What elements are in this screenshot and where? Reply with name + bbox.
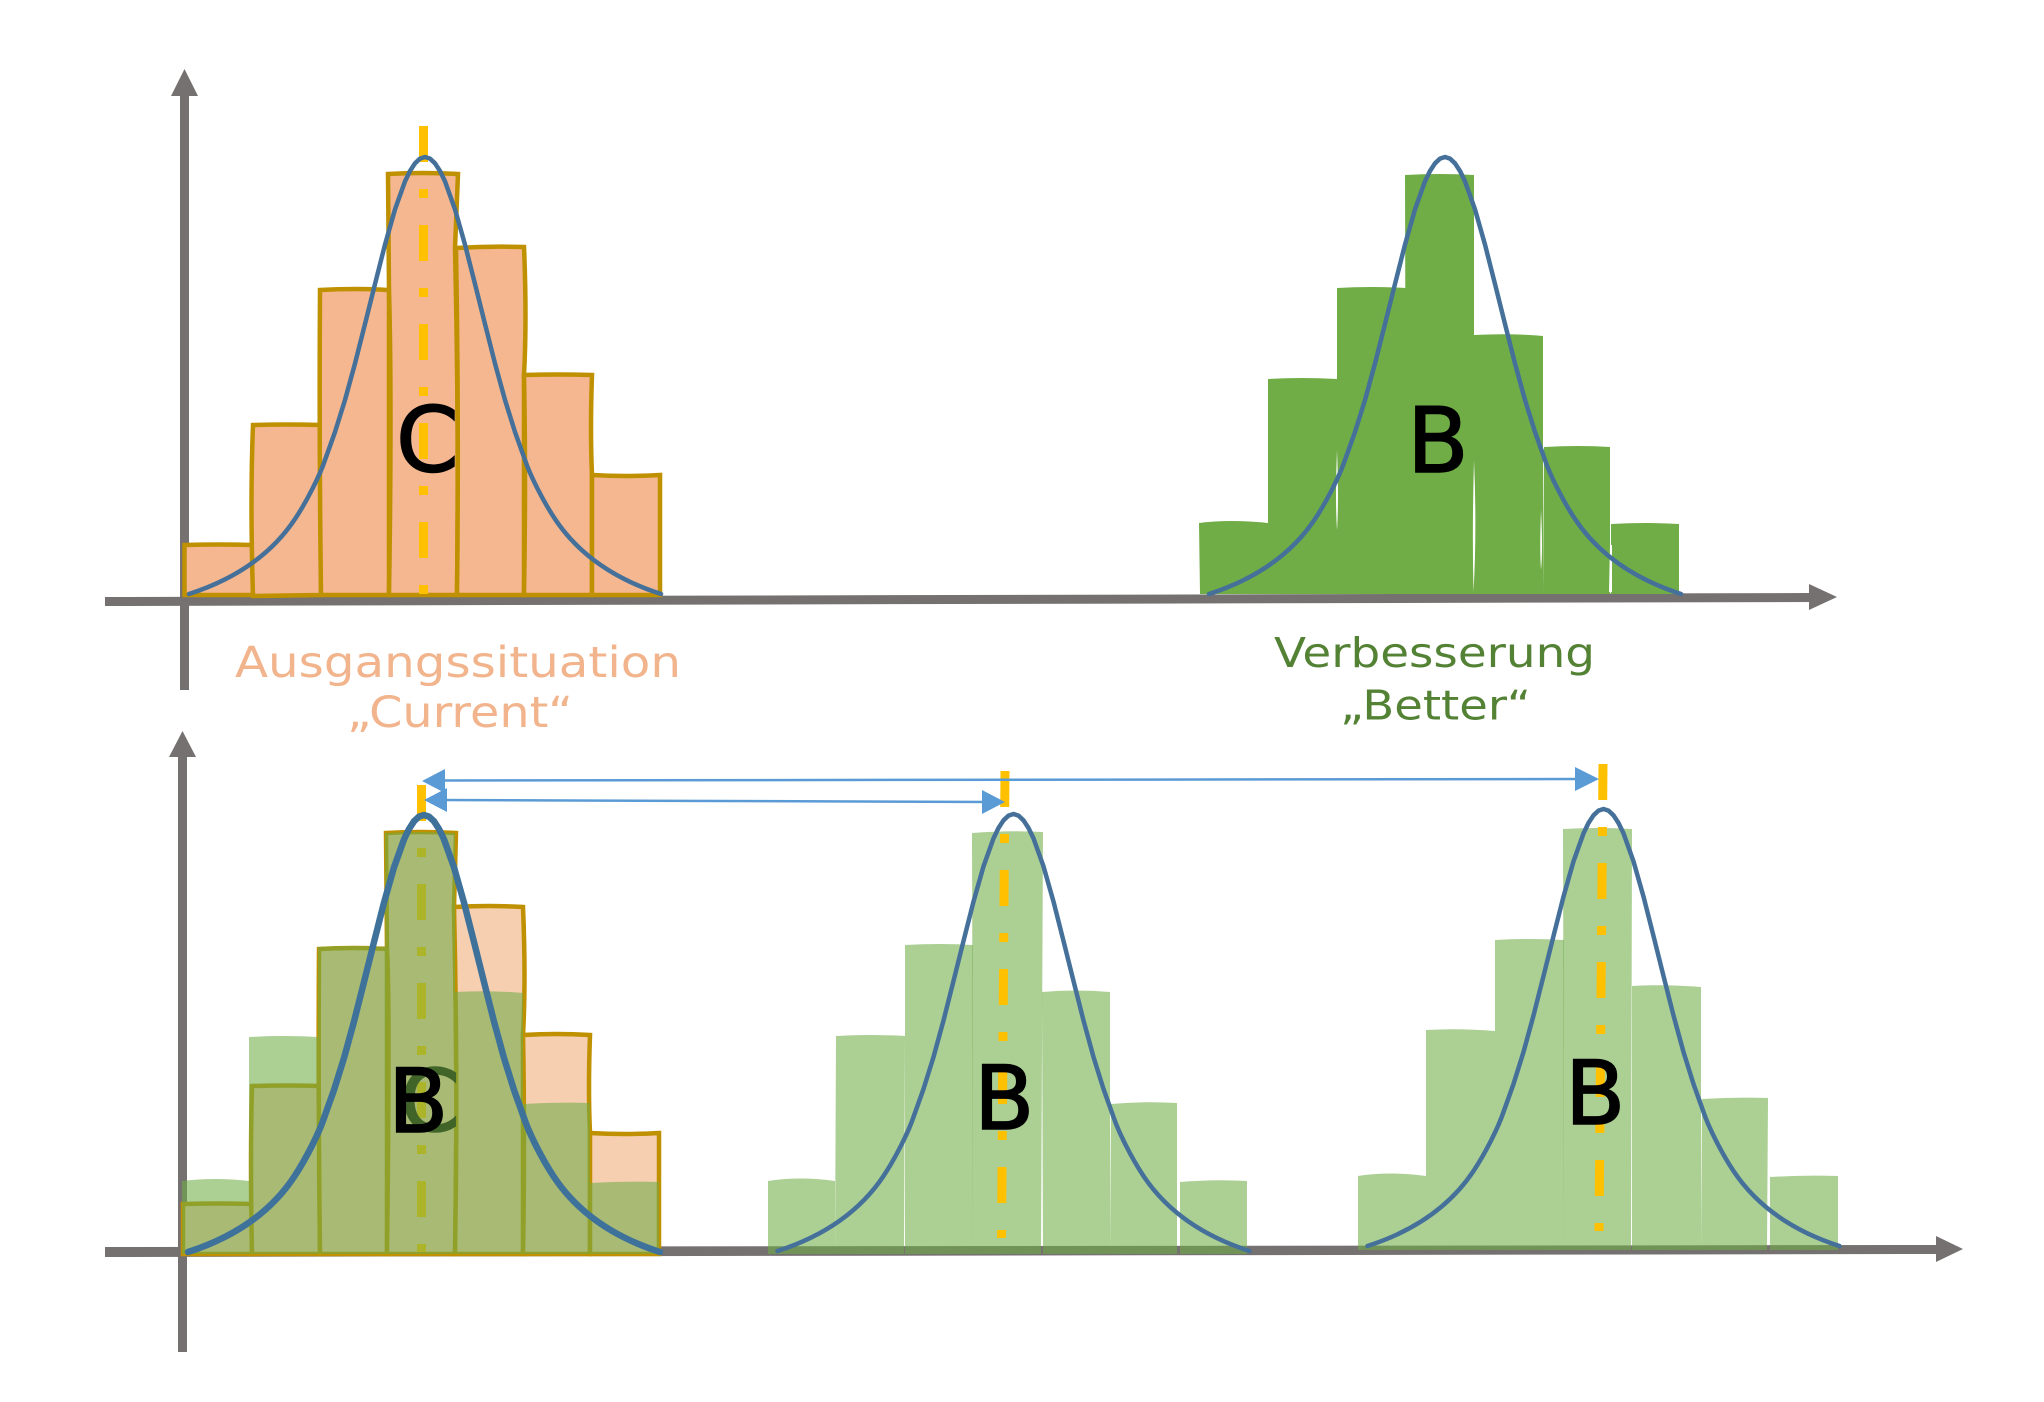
bell curve: middle [778, 814, 1250, 1251]
shifted distribution, right [1358, 764, 1840, 1250]
bell curve: better [1209, 157, 1681, 594]
label: Verbesserung Better: Verbesserung [1274, 629, 1595, 677]
histogram: current, faded [183, 832, 659, 1254]
median line: current [419, 126, 428, 594]
bottom x axis with arrow [105, 1236, 1963, 1262]
shifted distribution, middle [768, 771, 1250, 1254]
bell curve: current [189, 157, 661, 594]
histogram: better, transparent overlay [182, 832, 659, 1254]
histogram: middle [768, 831, 1247, 1254]
letter B: right: B [1565, 1042, 1625, 1145]
histogram: right [1358, 828, 1838, 1250]
letter B: B [1407, 389, 1469, 494]
letter B: middle: B [974, 1047, 1034, 1150]
label: Verbesserung Better [1274, 629, 1595, 730]
top chart: current and better distributions [105, 69, 1837, 690]
arrow: first position to right position [422, 767, 1599, 793]
bottom y axis with arrow [169, 731, 196, 1352]
median line: right [1599, 764, 1603, 1231]
bell curve: better, overlaid [188, 815, 660, 1252]
bell curve: right [1368, 809, 1840, 1246]
histogram: current [184, 173, 660, 596]
median line: current position [417, 785, 426, 1252]
label: Ausgangssituation Current [235, 638, 681, 738]
letter C under overlay: C [400, 1052, 460, 1152]
label: Ausgangssituation Current: Ausgangssituation [235, 638, 681, 688]
top y axis with arrow [171, 69, 198, 690]
arrow: first position to middle position [424, 788, 1005, 814]
bell curve: current position [189, 815, 661, 1252]
letter C: C [396, 388, 459, 493]
letter B, overlaid: B [388, 1050, 448, 1153]
white slits between better bars [1336, 450, 1612, 592]
overlaid distributions at first position [182, 785, 661, 1254]
median line: middle [1002, 771, 1005, 1238]
top x axis with arrow [105, 584, 1837, 610]
label: Ausgangssituation Current: „Current“ [347, 688, 573, 738]
label: Verbesserung Better: „Better“ [1340, 682, 1531, 730]
bottom chart: overlay and shifted distributions [105, 731, 1963, 1352]
histogram: better [1199, 174, 1679, 594]
